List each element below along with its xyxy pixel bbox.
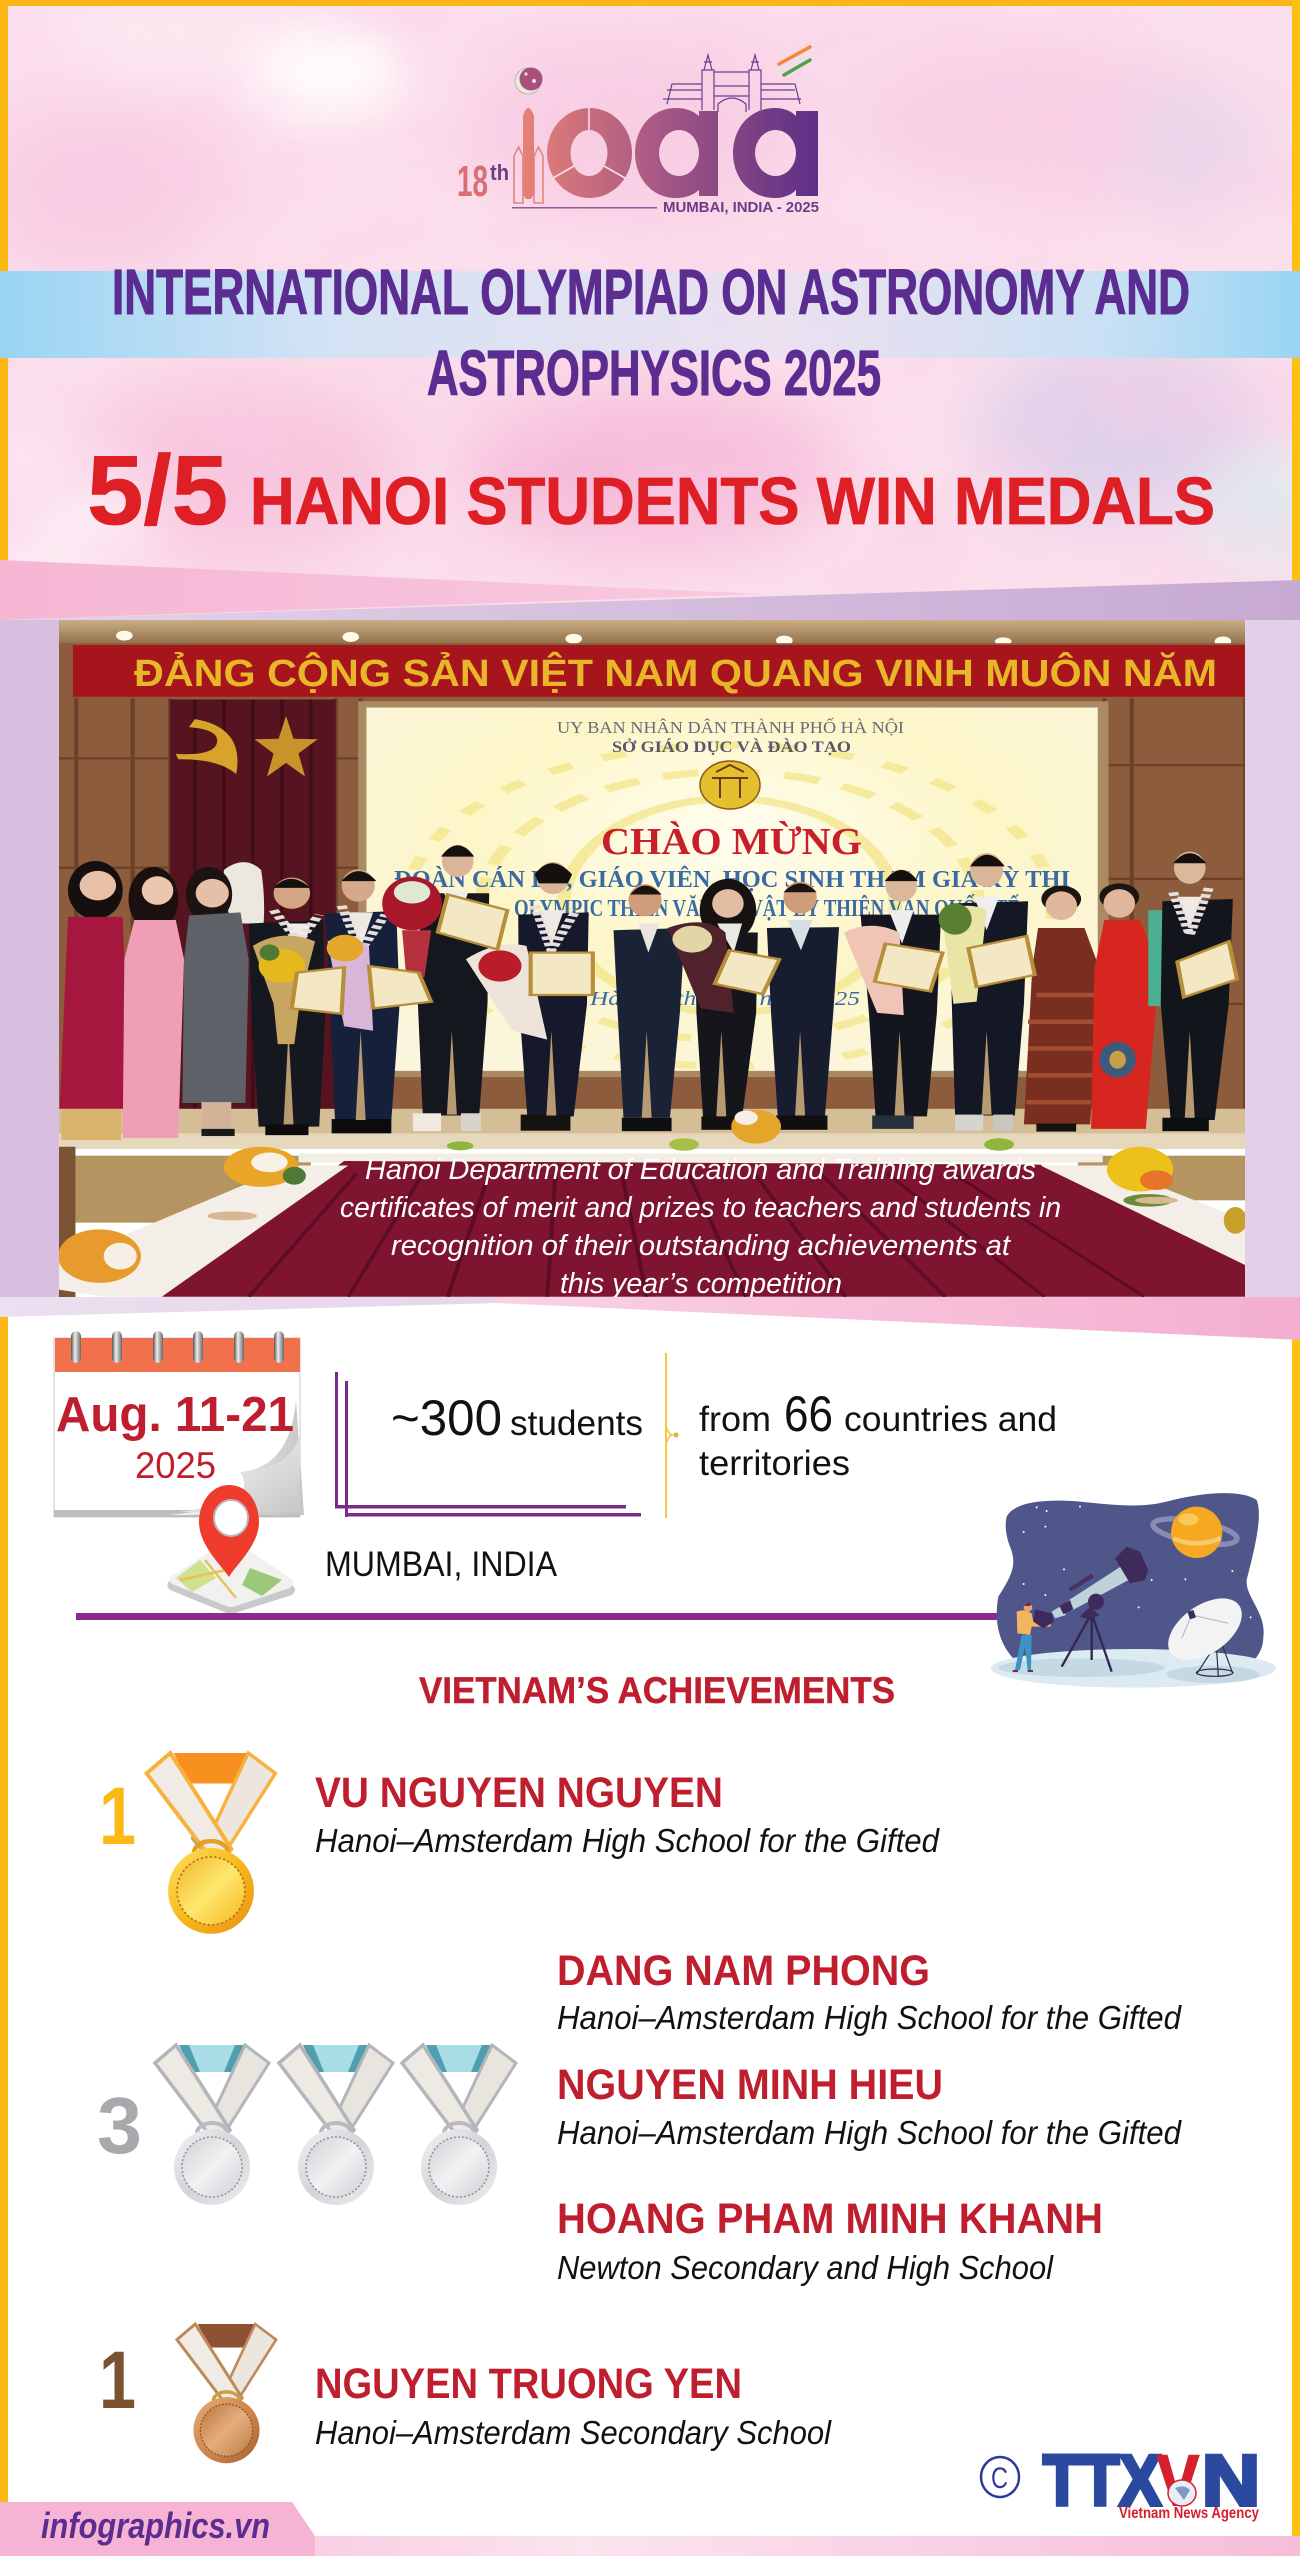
icon: gold medal (147, 1753, 275, 1934)
man far right (1148, 852, 1233, 1131)
telescope (1052, 1547, 1148, 1672)
school: Dang Nam Phong: Hanoi–Amsterdam High School for the Gifted (557, 1999, 1183, 2036)
front table (59, 1153, 1245, 1297)
stat: participating countries: from (699, 1400, 771, 1439)
official man left (614, 884, 685, 1131)
blue ribbon band (0, 271, 1300, 358)
tall student (413, 845, 489, 1131)
logo: IOAA 18th Mumbai India 2025 (457, 47, 819, 216)
hammer and sickle (176, 719, 237, 774)
purple corner lines (335, 1372, 641, 1517)
bronze count: 1 (99, 2335, 136, 2426)
ground (991, 1649, 1276, 1688)
photo banner slogan: ĐẢNG CỘNG SẢN VIỆT NAM QUANG VINH MUÔN NĂM (134, 650, 1217, 695)
photo caption: this year’s competition (560, 1268, 842, 1300)
headline: 5/5 Hanoi students win medals: HANOI STUDENTS WIN MEDALS (250, 464, 1215, 539)
astronomer (1013, 1603, 1054, 1672)
woman in pink ao dai (123, 867, 184, 1138)
icon: silver medal 2 (279, 2045, 393, 2205)
logo: TTXVN Vietnam News Agency: V (1157, 2442, 1199, 2521)
gold medalist: VU NGUYEN NGUYEN (315, 1769, 723, 1817)
student in black jacket (861, 870, 941, 1129)
purple section divider (76, 1613, 1001, 1620)
icon: calendar (54, 1331, 304, 1517)
decorative lower ribbon (0, 1297, 1300, 1340)
copyright symbol (981, 2457, 1019, 2497)
night sky (997, 1493, 1264, 1662)
logo 18th: 18 (457, 157, 488, 206)
calendar page curl (170, 1400, 304, 1515)
man with sunflower bouquet (249, 878, 325, 1135)
certificates (292, 895, 1237, 1014)
satellite dish (1157, 1586, 1253, 1677)
silver medalist: Hoang Pham Minh Khanh: HOANG PHAM MINH KHANH (557, 2195, 1103, 2243)
calendar date: Aug. 11-21 (56, 1388, 294, 1442)
woman in brown patterned ao dai (1024, 886, 1099, 1132)
student with glasses (518, 862, 589, 1131)
footer site label: infographics.vn (41, 2505, 270, 2546)
photo: award ceremony (58, 620, 1247, 1300)
logo: TTXVN Vietnam News Agency (1043, 2442, 1260, 2522)
photo screen text: Hà Nội, tháng 8 năm 2025 (589, 988, 860, 1010)
school: Nguyen Minh Hieu: Hanoi–Amsterdam High School for the Gifted (557, 2114, 1183, 2151)
icon: bronze medal (177, 2324, 276, 2463)
logo letters (514, 108, 818, 203)
bust statue (224, 862, 264, 924)
logo location text: MUMBAI, INDIA - 2025 (663, 199, 819, 216)
gold medalist school: Hanoi–Amsterdam High School for the Gifted (315, 1822, 941, 1859)
school: Hoang Pham Minh Khanh: Newton Secondary and High School (557, 2249, 1055, 2286)
decorative header ribbon (0, 560, 1300, 622)
calendar year: 2025 (135, 1445, 216, 1486)
bronze medalist: NGUYEN TRUONG YEN (315, 2360, 742, 2408)
photo side panels (0, 620, 1300, 1300)
stat: participating countries (699, 1386, 1057, 1483)
yellow divider with dot (665, 1353, 678, 1518)
table flowers (58, 1110, 1247, 1283)
stat: participating countries: countries and (844, 1400, 1057, 1439)
photo caption: certificates of merit and prizes to teachers and students in (340, 1192, 1061, 1224)
photo backdrop (59, 620, 1245, 1299)
gold star (255, 716, 318, 777)
header watercolor background (0, 0, 1300, 620)
stat: participating countries: territories (699, 1444, 850, 1483)
woman in crimson ao dai (60, 861, 129, 1140)
stars (1023, 1506, 1252, 1618)
photo screen text: SỞ GIÁO DỤC VÀ ĐÀO TẠO (612, 737, 851, 756)
title (112, 256, 1190, 409)
photo screen text: ĐOÀN CÁN BỘ, GIÁO VIÊN, HỌC SINH THAM GIA KỲ THI (394, 866, 1070, 893)
icon: location pin on map (168, 1485, 295, 1614)
calendar rings (71, 1331, 284, 1363)
headline: 5/5 Hanoi students win medals: 5/5 (87, 435, 228, 545)
logo 18th: th (490, 160, 509, 185)
photo caption: Hanoi Department of Education and Training awards (365, 1154, 1036, 1186)
bouquets (253, 877, 987, 1044)
photo screen text (394, 718, 1070, 1010)
footer band (0, 2502, 1300, 2556)
bronze medal section (99, 2324, 833, 2463)
bronze medalist school: Hanoi–Amsterdam Secondary School (315, 2414, 833, 2451)
man in navy suit (325, 870, 400, 1133)
illustration: astronomer with telescope (991, 1493, 1276, 1688)
stat: participating students: ~300 (391, 1390, 502, 1446)
icon: silver medal 3 (402, 2045, 516, 2205)
silver medalist: Dang Nam Phong: DANG NAM PHONG (557, 1947, 930, 1995)
photo screen text: UY BAN NHÂN DÂN THÀNH PHỐ HÀ NỘI (557, 718, 904, 737)
logo gateway outline (663, 55, 801, 112)
icon: silver medal 1 (155, 2045, 269, 2205)
logo: TTXVN Vietnam News Agency: Vietnam News Agency (1119, 2505, 1259, 2522)
woman in red ao dai (1091, 883, 1159, 1129)
headline: 5/5 Hanoi students win medals (87, 435, 1215, 545)
logo: TTXVN Vietnam News Agency: TTX (1043, 2442, 1161, 2521)
woman in grey suit (182, 867, 249, 1136)
photo screen text: CHÀO MỪNG (601, 821, 862, 863)
photo screen text: OLYMPIC THIÊN VĂN VÀ VẬT LÝ THIÊN VĂN QUỐC TẾ (514, 895, 1020, 922)
logo moon (515, 68, 542, 94)
stat: participating students: students (510, 1404, 643, 1443)
silver count: 3 (97, 2081, 142, 2170)
logo: TTXVN Vietnam News Agency: N (1202, 2442, 1260, 2521)
gold count: 1 (99, 1771, 136, 1862)
silver medalist: Nguyen Minh Hieu: NGUYEN MINH HIEU (557, 2061, 943, 2109)
gaps between trouser legs (284, 1031, 1195, 1124)
photo people on stage (58, 845, 1247, 1297)
logo underline (512, 207, 657, 208)
photo caption: recognition of their outstanding achievements at (391, 1230, 1012, 1262)
planet (1151, 1507, 1239, 1558)
text: host city: MUMBAI, INDIA (325, 1545, 558, 1584)
woman student with flowers (695, 879, 758, 1130)
stat: participating students (391, 1390, 643, 1446)
silver medal section (97, 1947, 1183, 2286)
heading: Vietnam's achievements: VIETNAM’S ACHIEVEMENTS (419, 1670, 895, 1711)
copyright symbol: C (991, 2462, 1008, 2495)
title: ASTROPHYSICS 2025 (427, 337, 881, 409)
gold medal section (99, 1753, 941, 1934)
logo tricolor flourish (776, 47, 810, 75)
photo caption (340, 1154, 1061, 1300)
official man right (767, 882, 839, 1130)
tall student right (950, 853, 1028, 1131)
stat: participating countries: 66 (784, 1386, 833, 1442)
